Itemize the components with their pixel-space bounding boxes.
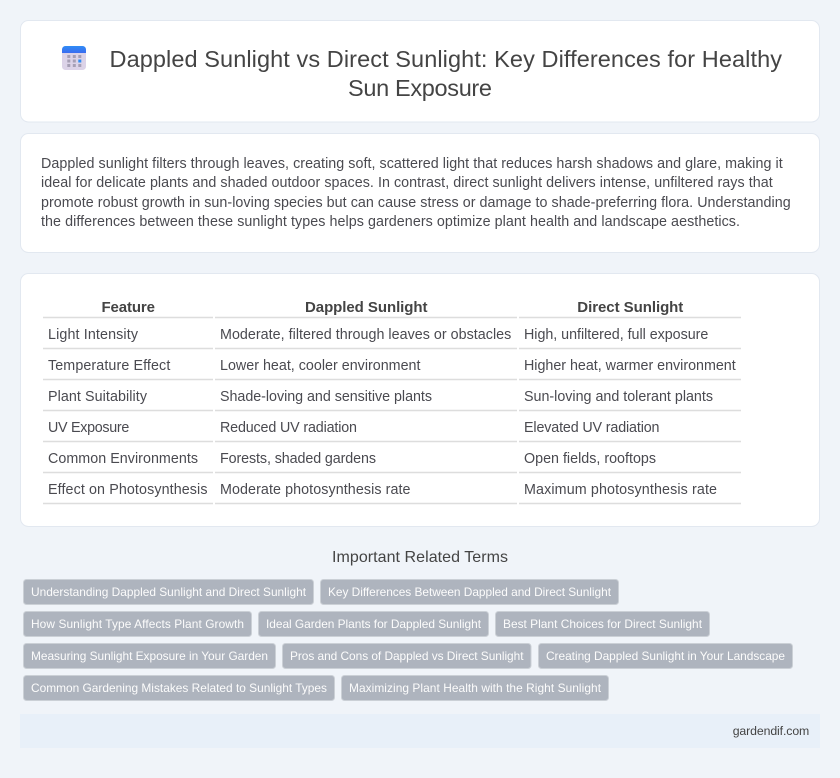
intro text block: Dappled sunlight filters through leaves, creating soft, scattered light that reduces harsh shadows and glare, making it [41,156,783,172]
tag: How Sunlight Type Affects Plant Growth [31,617,244,631]
intro text block: promote robust growth in sun-loving species but can cause stress or damage to shade-preferring flora. Understanding [41,195,791,211]
table row: effect on photosynthesis: Moderate photosynthesis rate [220,482,411,498]
table row: effect on photosynthesis [43,482,741,504]
tag [282,644,531,668]
table header row [43,299,741,318]
tag [24,644,276,668]
table header row: Feature [102,299,155,316]
footer [20,714,820,748]
tag [258,612,488,636]
table row: effect on photosynthesis: Maximum photosynthesis rate [524,482,717,498]
tag [320,580,618,604]
table row: temperature effect: Lower heat, cooler environment [220,358,421,374]
panel: introduction [20,134,820,252]
table row: light intensity [43,327,741,348]
table row: plant suitability: Plant Suitability [48,389,148,405]
heading: important related terms: Important Related Terms [332,549,508,566]
tag: Best Plant Choices for Direct Sunlight [503,617,703,631]
table row: common environments [43,451,741,472]
tag [24,612,252,636]
table row: common environments: Open fields, rooftops [524,451,656,467]
panel: comparison table [20,274,820,526]
table row: common environments: Common Environments [48,451,198,467]
table row: common environments: Forests, shaded gardens [220,451,376,467]
table row: plant suitability: Sun-loving and tolerant plants [524,389,713,405]
table row: light intensity: High, unfiltered, full exposure [524,327,708,343]
table header row: Direct Sunlight [577,299,683,316]
table row: effect on photosynthesis: Effect on Photosynthesis [48,482,208,498]
tag [538,644,792,668]
table row: light intensity: Light Intensity [48,327,139,343]
title: Dappled Sunlight vs Direct Sunlight: Key Differences for Healthy [110,46,782,72]
tag: Common Gardening Mistakes Related to Sunlight Types [31,681,327,695]
table row: uv exposure: UV Exposure [48,420,129,436]
intro text block: the differences between these sunlight types helps gardeners optimize plant health and landscape aesthetics. [41,214,740,230]
title [110,46,782,101]
table row: plant suitability [43,389,741,410]
table row: light intensity: Moderate, filtered through leaves or obstacles [220,327,511,343]
table row: temperature effect: Higher heat, warmer environment [524,358,736,374]
intro text block [41,156,791,230]
tag: Ideal Garden Plants for Dappled Sunlight [266,617,482,631]
tag: Understanding Dappled Sunlight and Direct Sunlight [31,585,307,599]
intro text block: ideal for delicate plants and shaded outdoor spaces. In contrast, direct sunlight delivers intense, unfiltered rays that [41,175,773,191]
table row: uv exposure [43,420,741,442]
tag: Maximizing Plant Health with the Right Sunlight [349,681,602,695]
table row: uv exposure: Elevated UV radiation [524,420,660,436]
tag: Pros and Cons of Dappled vs Direct Sunlight [290,649,524,663]
tag [24,676,334,700]
tag [24,580,314,604]
tag [342,676,608,700]
tag [496,612,710,636]
table row: uv exposure: Reduced UV radiation [220,420,357,436]
table row: temperature effect [43,358,741,380]
panel: header [20,20,820,122]
title: Sun Exposure [348,75,492,101]
footer: gardendif.com [733,724,809,738]
panel: related term tags [24,580,792,700]
icon: calendar [62,46,86,70]
table row: plant suitability: Shade-loving and sensitive plants [220,389,432,405]
table header row: Dappled Sunlight [305,299,428,316]
tag: Creating Dappled Sunlight in Your Landscape [546,649,785,663]
table row: temperature effect: Temperature Effect [48,358,170,374]
tag: Key Differences Between Dappled and Direct Sunlight [328,585,612,599]
tag: Measuring Sunlight Exposure in Your Garden [31,649,268,663]
